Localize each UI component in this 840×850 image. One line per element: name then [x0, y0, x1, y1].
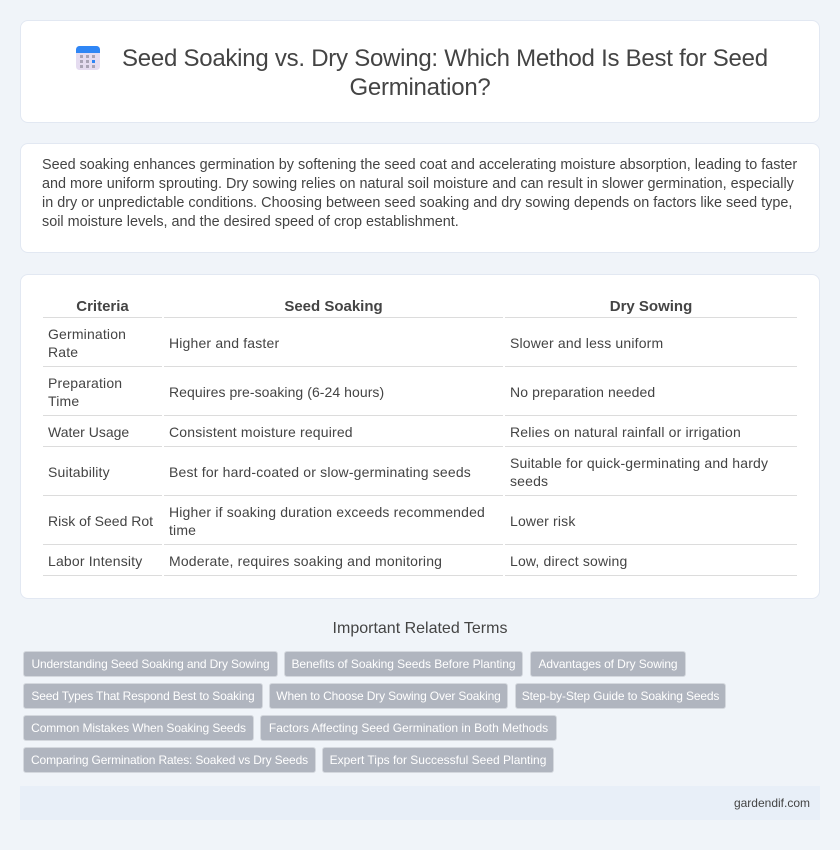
row: preparation time: Time [48, 393, 79, 409]
title: Seed Soaking vs. Dry Sowing: Which Method Is Best for Seed [122, 45, 768, 72]
comparison table panel: Best for hard-coated or slow-germinating seeds [169, 464, 471, 480]
related terms tags: Expert Tips for Successful Seed Planting [330, 753, 546, 767]
related terms tags: When to Choose Dry Sowing Over Soaking [276, 689, 501, 703]
comparison table panel: Higher and faster [169, 335, 279, 351]
row: suitability: Suitability [48, 464, 110, 480]
header panel [20, 20, 820, 123]
title [122, 45, 768, 101]
related terms tags: Understanding Seed Soaking and Dry Sowing [31, 657, 270, 671]
comparison table panel: seeds [510, 473, 548, 489]
table header: Criteria [76, 298, 129, 315]
row: preparation time [48, 375, 122, 409]
icon: calendar [76, 46, 100, 70]
row: germination rate: Rate [48, 344, 78, 360]
related terms tags: Comparing Germination Rates: Soaked vs Dry Seeds [31, 753, 308, 767]
intro text: and more uniform sprouting. Dry sowing relies on natural soil moisture and can result in slower germination, especially [42, 176, 794, 192]
source credit: gardendif.com [734, 796, 810, 810]
comparison table panel: Slower and less uniform [510, 335, 663, 351]
comparison table panel: Low, direct sowing [510, 553, 627, 569]
comparison table panel: Moderate, requires soaking and monitoring [169, 553, 442, 569]
related terms tags [23, 651, 726, 773]
intro text [42, 157, 797, 230]
comparison table panel: No preparation needed [510, 384, 655, 400]
intro text: Seed soaking enhances germination by softening the seed coat and accelerating moisture absorption, leading to faster [42, 157, 797, 173]
comparison table panel: Suitable for quick-germinating and hardy [510, 455, 768, 471]
related terms tags: Factors Affecting Seed Germination in Both Methods [269, 721, 548, 735]
related terms heading: Important Related Terms [333, 620, 507, 637]
comparison table panel [20, 274, 820, 599]
footer [20, 786, 820, 820]
related terms tags: Seed Types That Respond Best to Soaking [31, 689, 255, 703]
title: Germination? [349, 74, 491, 101]
related terms tags: Common Mistakes When Soaking Seeds [31, 721, 246, 735]
comparison table panel: Consistent moisture required [169, 424, 353, 440]
row: preparation time: Preparation [48, 375, 122, 391]
intro text: soil moisture levels, and the desired speed of crop establishment. [42, 214, 459, 230]
intro text: in dry or unpredictable conditions. Choosing between seed soaking and dry sowing depends on factors like seed type, [42, 195, 792, 211]
comparison table panel: Higher if soaking duration exceeds recommended [169, 504, 485, 520]
row: germination rate [48, 326, 126, 360]
row: labor intensity: Labor Intensity [48, 553, 142, 569]
related terms tags: Advantages of Dry Sowing [538, 657, 678, 671]
row: germination rate: Germination [48, 326, 126, 342]
comparison table panel: Dry Sowing [610, 298, 692, 315]
comparison table panel: Lower risk [510, 513, 576, 529]
related terms tags: Benefits of Soaking Seeds Before Planting [291, 657, 516, 671]
row: risk of seed rot: Risk of Seed Rot [48, 513, 153, 529]
related terms tags: Step-by-Step Guide to Soaking Seeds [522, 689, 719, 703]
comparison table panel: Seed Soaking [284, 298, 383, 315]
comparison table panel: Relies on natural rainfall or irrigation [510, 424, 741, 440]
comparison table panel: Requires pre-soaking (6-24 hours) [169, 384, 384, 400]
comparison table panel: time [169, 522, 196, 538]
intro panel [20, 143, 820, 253]
row: water usage: Water Usage [48, 424, 129, 440]
